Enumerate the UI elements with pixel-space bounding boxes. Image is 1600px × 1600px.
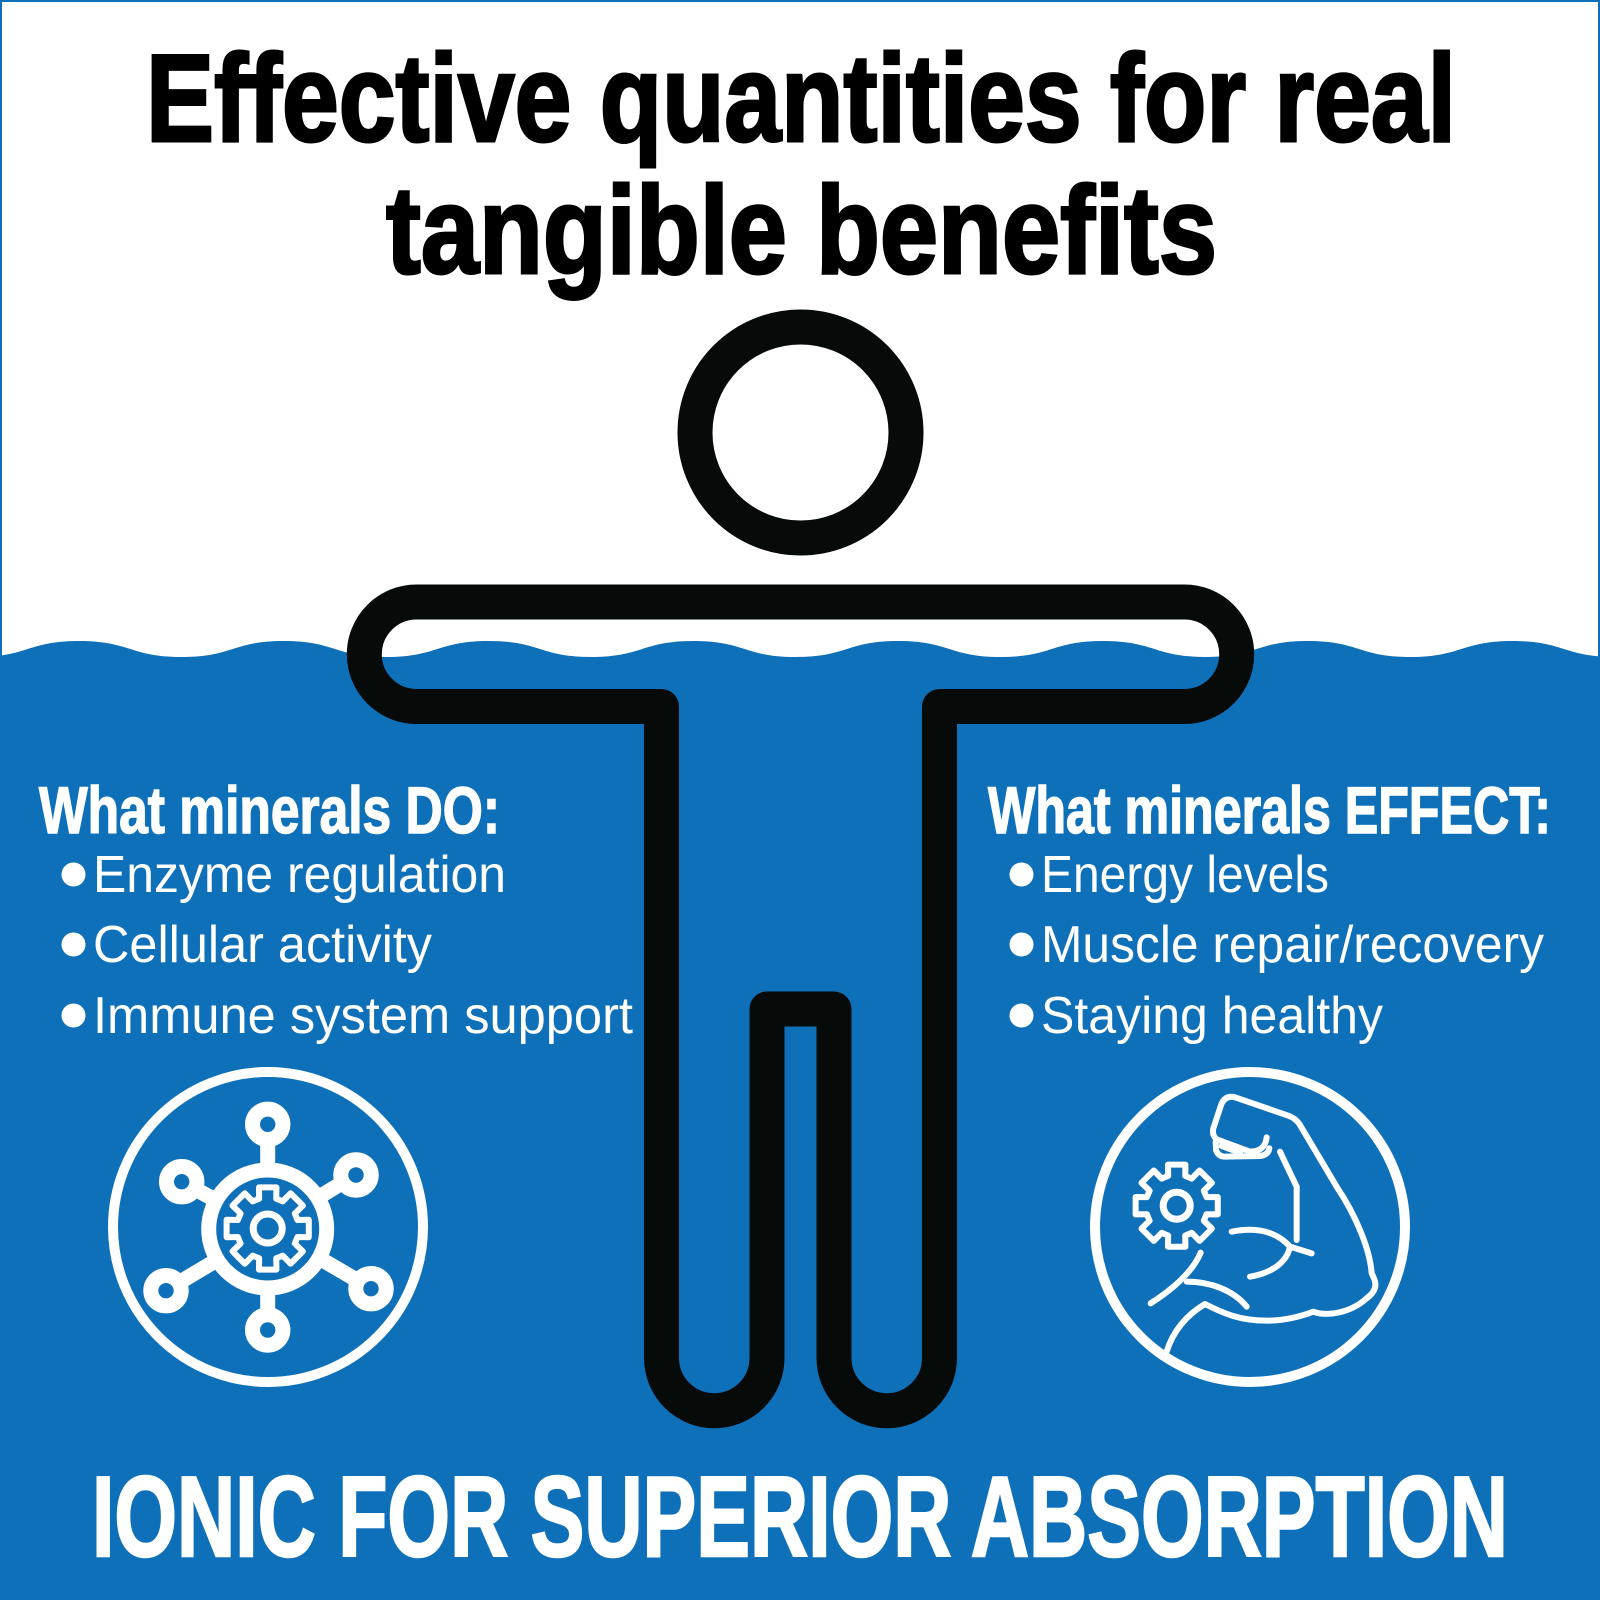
title: tangible benefits: [386, 162, 1217, 300]
list: minerals do: Immune system support: [93, 987, 634, 1045]
figure head: [695, 327, 906, 538]
list: minerals effect: Staying healthy: [1041, 987, 1383, 1045]
list: minerals effect: Muscle repair/recovery: [1041, 916, 1544, 974]
list: minerals do: Enzyme regulation: [93, 846, 506, 904]
water background with waves: [0, 641, 1600, 1600]
human figure standing in water: [364, 327, 1237, 1411]
panel: what minerals effect: [988, 773, 1551, 1045]
figure body with arms and legs: [364, 602, 1237, 1411]
heading: what minerals do: What minerals DO:: [39, 773, 500, 847]
list: minerals do: Cellular activity: [93, 916, 432, 974]
list: minerals effect: Energy levels: [1041, 846, 1329, 904]
icon: cell network with gear: [113, 1072, 423, 1382]
icon: flexed muscle with gear: [1095, 1072, 1405, 1382]
panel: what minerals do: [39, 773, 634, 1045]
list: minerals do: [62, 846, 634, 1045]
title: [146, 30, 1456, 300]
list: minerals effect: [1010, 846, 1544, 1045]
